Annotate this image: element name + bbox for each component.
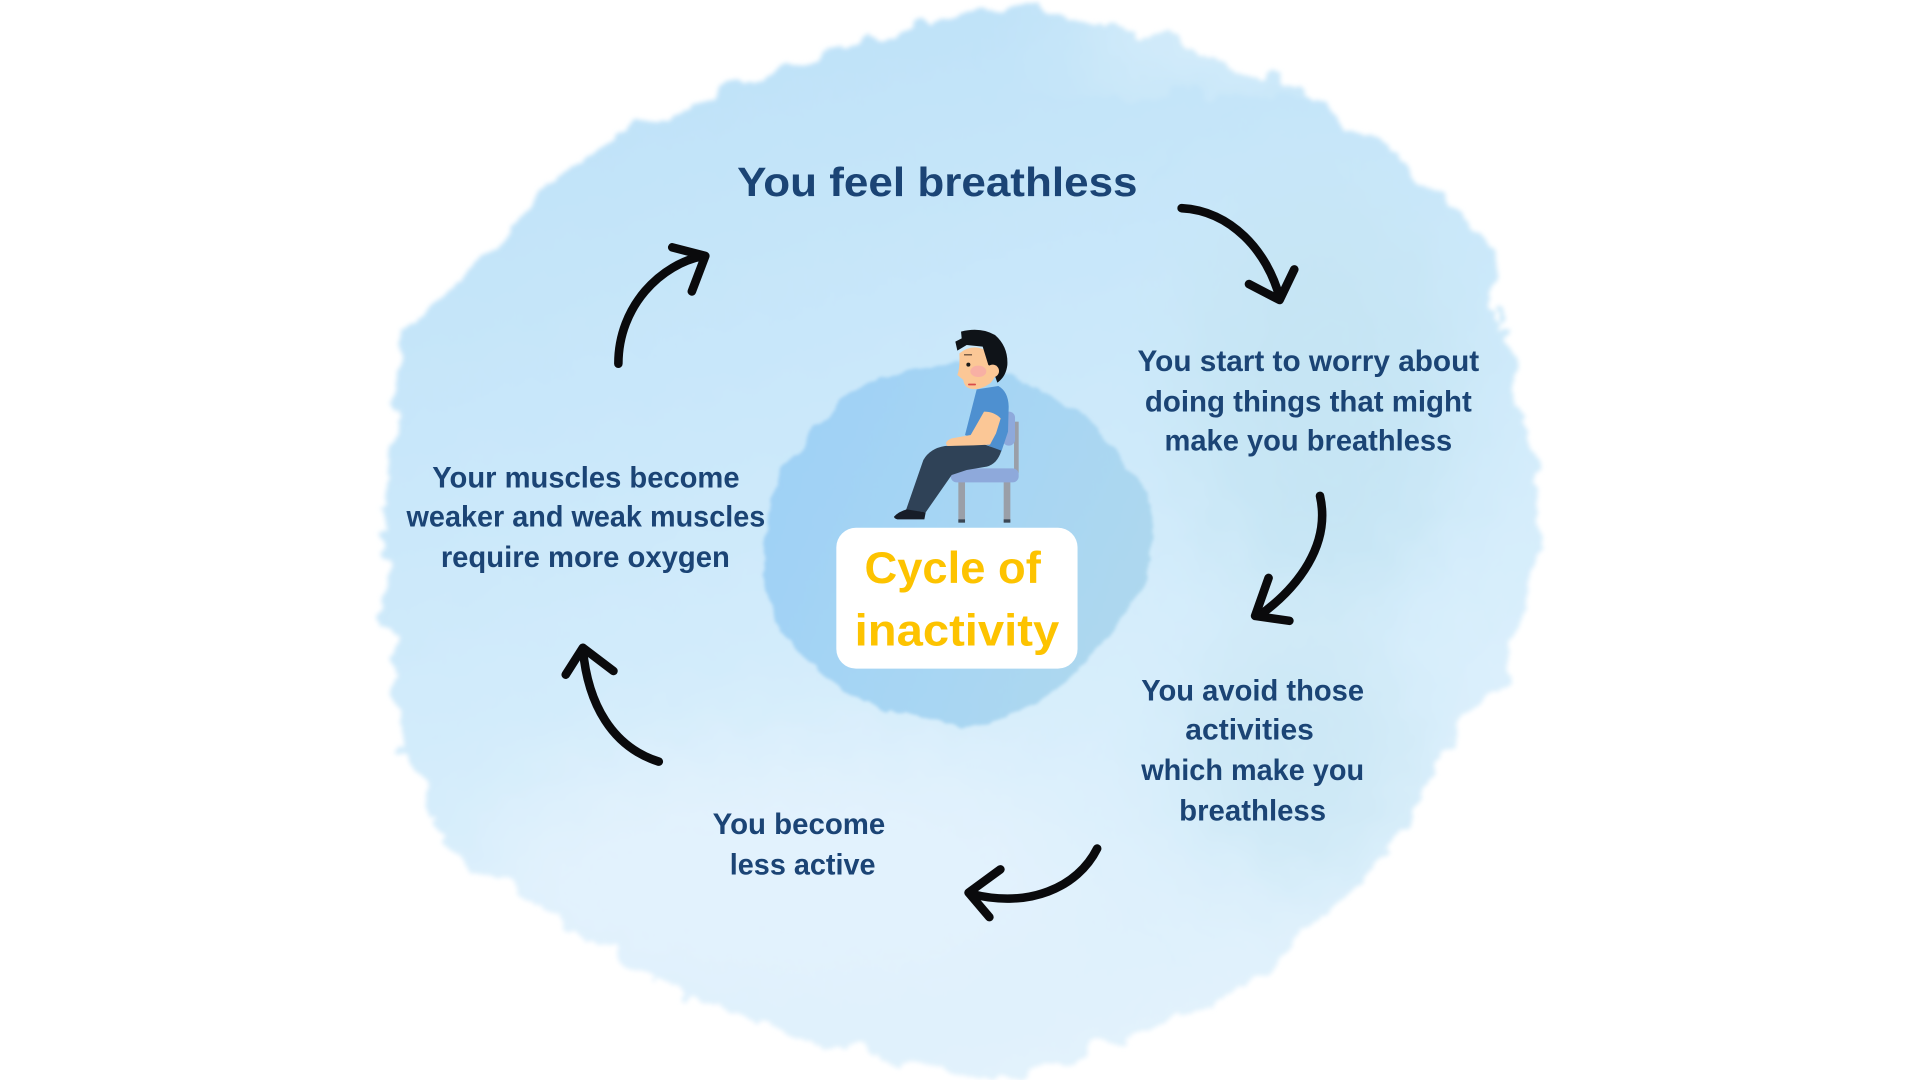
outer watercolor blob — [355, 0, 1567, 1080]
chair — [951, 412, 1019, 523]
step: avoid activities: breathless — [1179, 794, 1326, 827]
step: avoid activities — [1140, 674, 1364, 827]
arm — [946, 412, 1001, 446]
step: weaker muscles: weaker and weak muscles — [406, 501, 765, 534]
arrow: weaker muscles to breathless — [618, 247, 705, 364]
step: avoid activities: activities — [1185, 714, 1314, 747]
arrow: breathless to worry — [1182, 208, 1294, 300]
arrow: avoid to less active — [969, 849, 1097, 917]
head — [955, 330, 1007, 389]
step: avoid activities: You avoid those — [1141, 674, 1364, 707]
arrow: worry to avoid — [1255, 496, 1322, 621]
inner watercolor blob — [763, 362, 1152, 723]
icon: person sitting on chair — [894, 330, 1019, 523]
infographic canvas — [374, 0, 1544, 1080]
step: less active: You become — [713, 808, 885, 841]
step: weaker muscles: require more oxygen — [441, 541, 730, 574]
heading: you feel breathless: You feel breathless — [737, 159, 1138, 205]
title box: cycle of inactivity: Cycle of — [864, 544, 1041, 593]
shirt — [965, 386, 1009, 452]
shoe — [894, 509, 926, 519]
step: worry — [1138, 345, 1479, 458]
step: worry: doing things that might — [1145, 385, 1472, 418]
step: less active: less active — [730, 848, 876, 881]
arrow: less active to weaker muscles — [566, 648, 659, 762]
step: worry: make you breathless — [1164, 425, 1452, 458]
title box: cycle of inactivity: inactivity — [855, 606, 1060, 655]
step: less active — [713, 808, 885, 881]
step: worry: You start to worry about — [1138, 345, 1479, 378]
step: weaker muscles: Your muscles become — [432, 461, 740, 494]
title box: cycle of inactivity — [836, 528, 1078, 669]
step: weaker muscles — [406, 461, 765, 574]
trousers — [906, 444, 1001, 512]
step: avoid activities: which make you — [1140, 754, 1364, 787]
